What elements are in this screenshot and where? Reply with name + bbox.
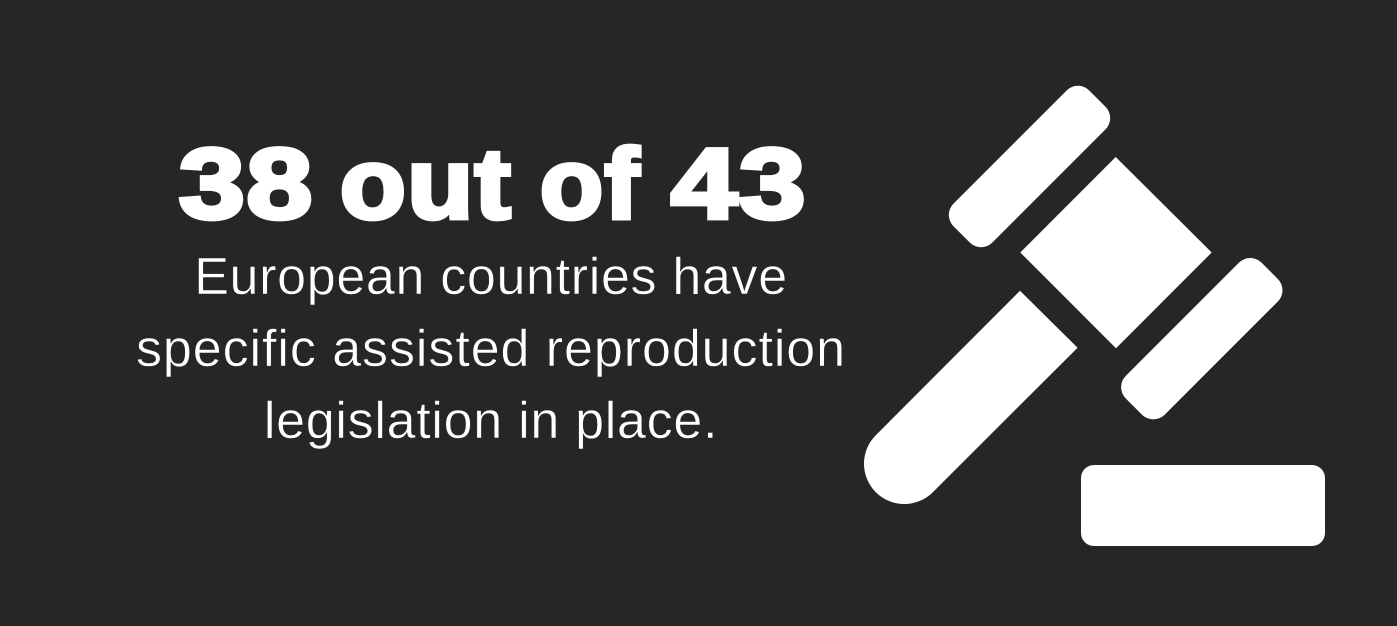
- gavel lower bar: [1114, 251, 1289, 426]
- headline: 38 out of 43: of: [540, 129, 641, 240]
- gavel head: [1020, 157, 1212, 348]
- gavel upper bar: [942, 79, 1117, 254]
- headline: 38 out of 43: 43: [671, 129, 807, 240]
- gavel handle: [864, 291, 1078, 504]
- headline: 38 out of 43: 38: [179, 129, 314, 240]
- body text block: legislation in place.: [264, 392, 718, 450]
- body text block: [136, 248, 846, 450]
- gavel base block: [1081, 465, 1325, 546]
- body text block: European countries have: [194, 248, 788, 306]
- headline: 38 out of 43: [178, 129, 807, 240]
- body text block: specific assisted reproduction: [136, 320, 846, 378]
- headline: 38 out of 43: out: [340, 129, 512, 240]
